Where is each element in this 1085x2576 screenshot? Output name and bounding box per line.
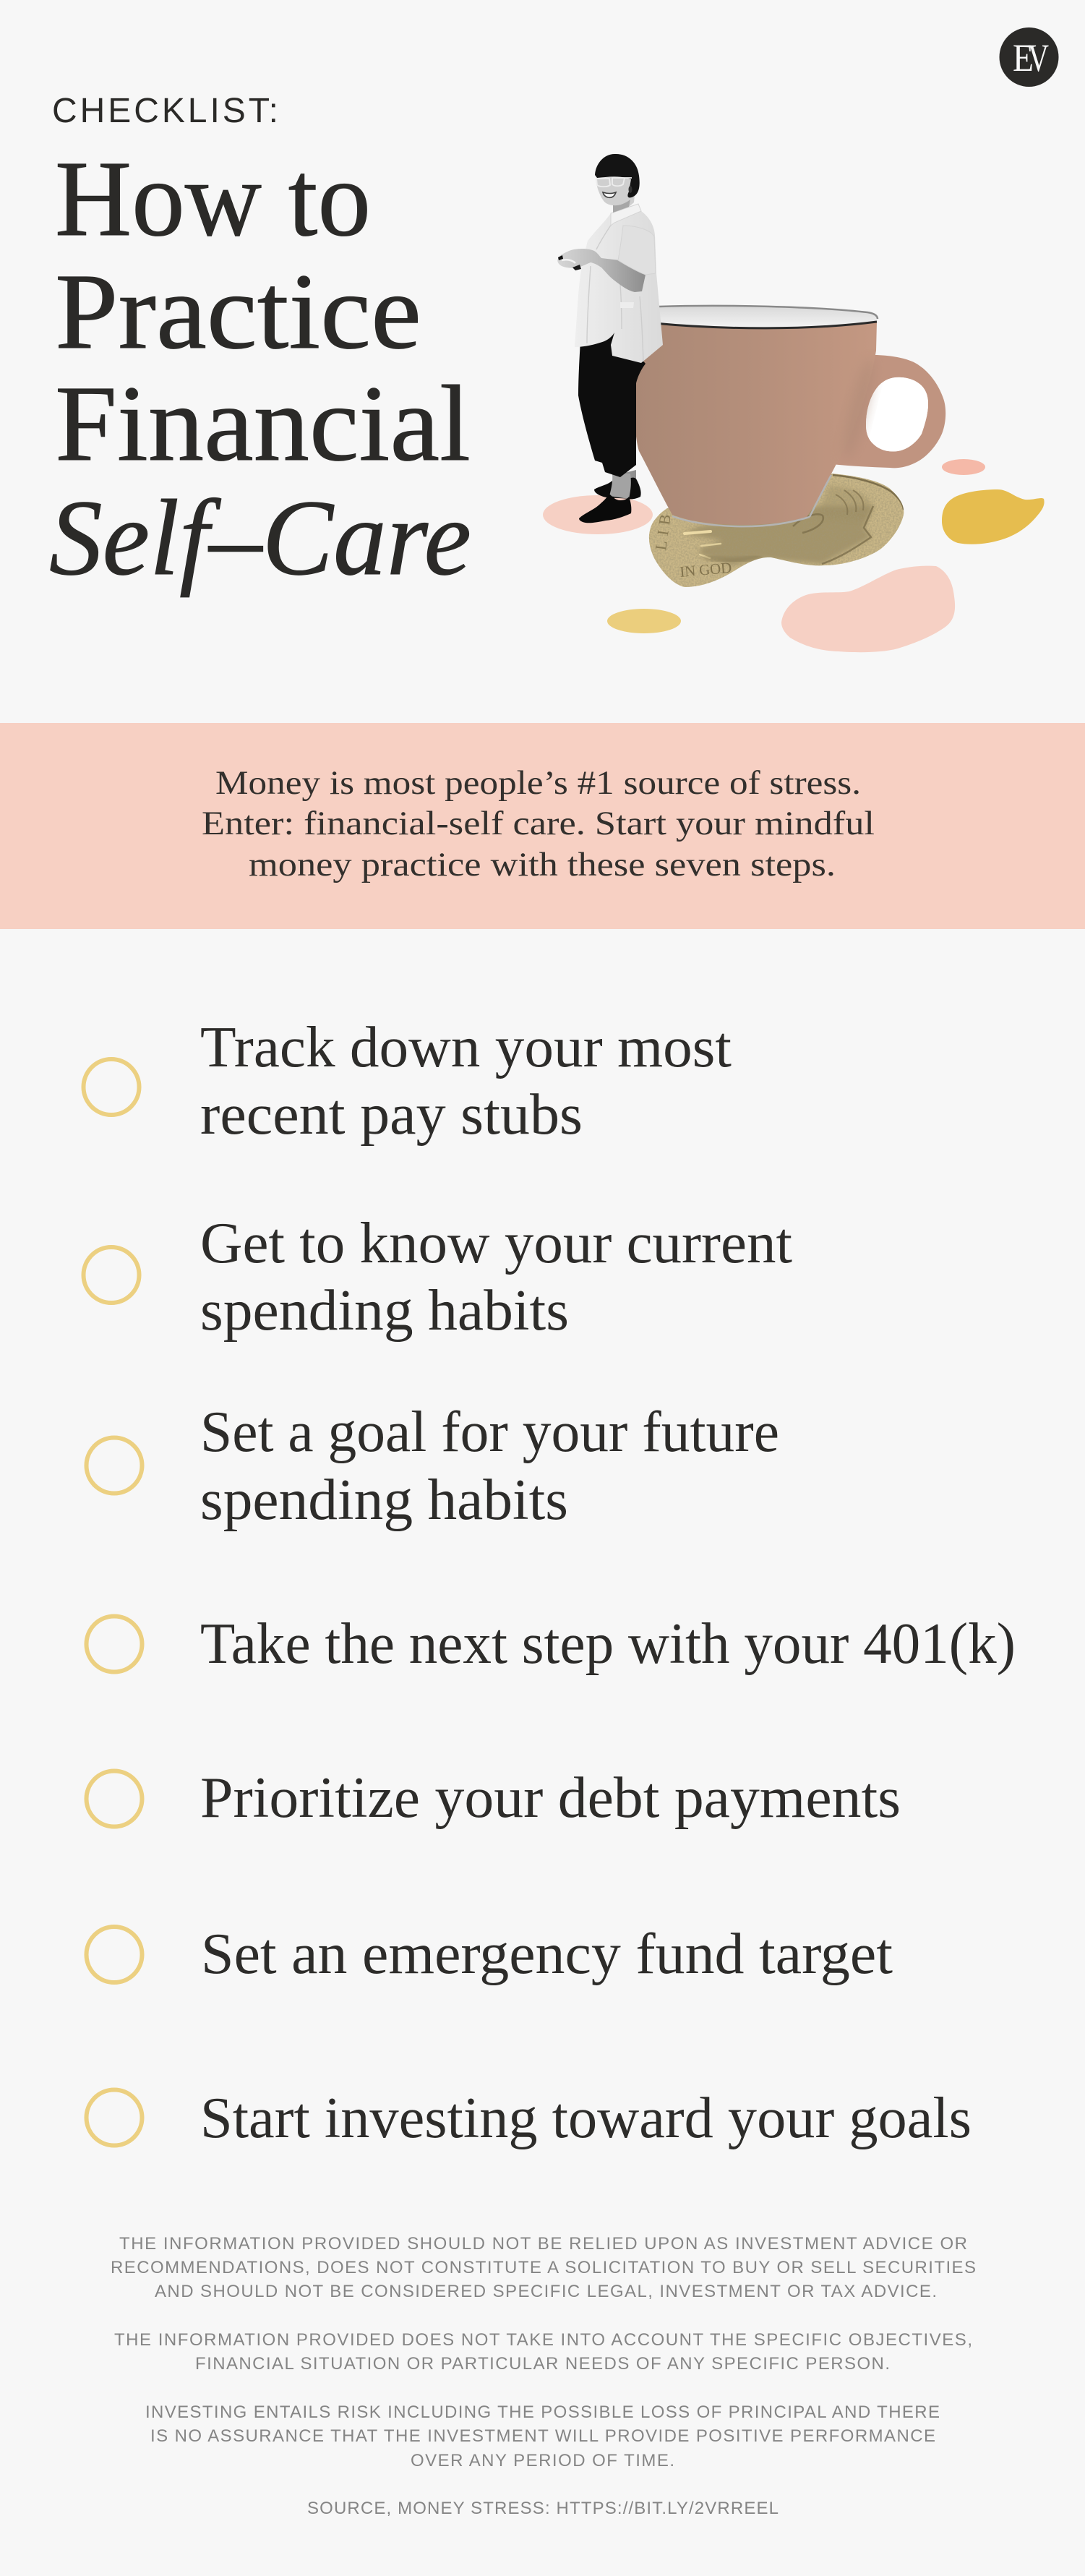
cup handle hole — [866, 377, 928, 451]
logo: EV badge — [999, 27, 1058, 87]
checklist — [84, 1016, 1016, 2150]
person — [557, 154, 663, 523]
panel: intro banner — [0, 723, 1085, 929]
item 3: Set a goal for your future — [200, 1400, 779, 1464]
item 1: recent pay stubs — [200, 1083, 583, 1147]
intro text: Enter: financial-self care. Start your mindful — [202, 805, 875, 842]
disclaimer paragraph 2: FINANCIAL SITUATION OR PARTICULAR NEEDS OF ANY SPECIFIC PERSON. — [195, 2354, 890, 2374]
item 2 — [84, 1212, 792, 1343]
disclaimer paragraph 1: AND SHOULD NOT BE CONSIDERED SPECIFIC LEGAL, INVESTMENT OR TAX ADVICE. — [155, 2282, 937, 2301]
neck and face — [596, 177, 635, 213]
back leg and shoe — [594, 470, 641, 499]
intro text: Money is most people’s #1 source of stress. — [215, 764, 861, 802]
title: Self–Care — [49, 478, 471, 598]
blob: small salmon — [942, 459, 985, 475]
collar — [611, 204, 641, 226]
header: checklist label and title — [49, 92, 471, 598]
front ankle — [609, 474, 631, 499]
earring — [629, 186, 632, 193]
item 2: Get to know your current — [200, 1212, 792, 1275]
title: Practice — [55, 252, 421, 372]
cup — [635, 306, 945, 526]
item 1: Track down your most — [200, 1016, 732, 1079]
disclaimer paragraph 2 — [114, 2330, 972, 2374]
item 3 — [87, 1400, 779, 1532]
cup base line — [672, 475, 831, 526]
item 2: spending habits — [200, 1279, 569, 1343]
blob: pink under feet — [543, 495, 653, 534]
eyebrow: checklist: CHECKLIST: — [52, 92, 278, 130]
disclaimer paragraph 3: IS NO ASSURANCE THAT THE INVESTMENT WILL PROVIDE POSITIVE PERFORMANCE — [150, 2426, 935, 2446]
item 5: Prioritize your debt payments — [200, 1766, 901, 1830]
cup rim line — [654, 322, 877, 328]
blob: big yellow — [942, 489, 1045, 544]
cup interior rim — [654, 306, 878, 329]
disclaimer paragraph 2: THE INFORMATION PROVIDED DOES NOT TAKE INTO ACCOUNT THE SPECIFIC OBJECTIVES, — [114, 2330, 972, 2350]
disclaimer paragraph 3: INVESTING ENTAILS RISK INCLUDING THE POSSIBLE LOSS OF PRINCIPAL AND THERE — [145, 2402, 940, 2422]
trousers — [578, 329, 646, 477]
hair — [595, 154, 640, 197]
blob: small yellow — [607, 609, 681, 633]
disclaimer paragraph 1: RECOMMENDATIONS, DOES NOT CONSTITUTE A SOLICITATION TO BUY OR SELL SECURITIES — [111, 2258, 976, 2277]
coin: IN GOD — [679, 559, 732, 581]
intro text — [202, 764, 875, 883]
coin: LIB — [651, 513, 674, 552]
title: How to — [55, 139, 371, 259]
footer disclaimer — [111, 2234, 976, 2518]
title — [49, 139, 471, 598]
disclaimer paragraph 3: OVER ANY PERIOD OF TIME. — [411, 2451, 674, 2470]
item 7: Start investing toward your goals — [200, 2087, 972, 2150]
forearm and hands — [557, 249, 646, 292]
title: Financial — [55, 364, 471, 484]
item 4: Take the next step with your 401(k) — [200, 1612, 1016, 1676]
item 1 — [84, 1016, 732, 1147]
shirt — [575, 204, 663, 363]
disclaimer paragraph 1: THE INFORMATION PROVIDED SHOULD NOT BE RELIED UPON AS INVESTMENT ADVICE OR — [119, 2234, 967, 2254]
item 6: Set an emergency fund target — [201, 1922, 893, 1986]
cup handle — [831, 355, 945, 468]
intro text: money practice with these seven steps. — [249, 846, 836, 883]
front shoe — [579, 494, 631, 523]
smile — [603, 192, 616, 197]
disclaimer paragraph 3 — [145, 2402, 940, 2470]
source line: SOURCE, MONEY STRESS: HTTPS://BIT.LY/2VRREEL — [307, 2499, 779, 2518]
blob: big pink — [781, 566, 955, 652]
logo: EV badge: V — [1028, 36, 1049, 80]
logo: EV badge: E — [1013, 36, 1034, 80]
cup body — [635, 322, 877, 525]
illustration: person beside a giant cup on a coin — [543, 154, 1045, 652]
sleeve — [618, 226, 656, 275]
coin — [649, 474, 904, 587]
glasses — [596, 178, 632, 187]
disclaimer paragraph 1 — [111, 2234, 976, 2301]
item 3: spending habits — [200, 1468, 568, 1532]
